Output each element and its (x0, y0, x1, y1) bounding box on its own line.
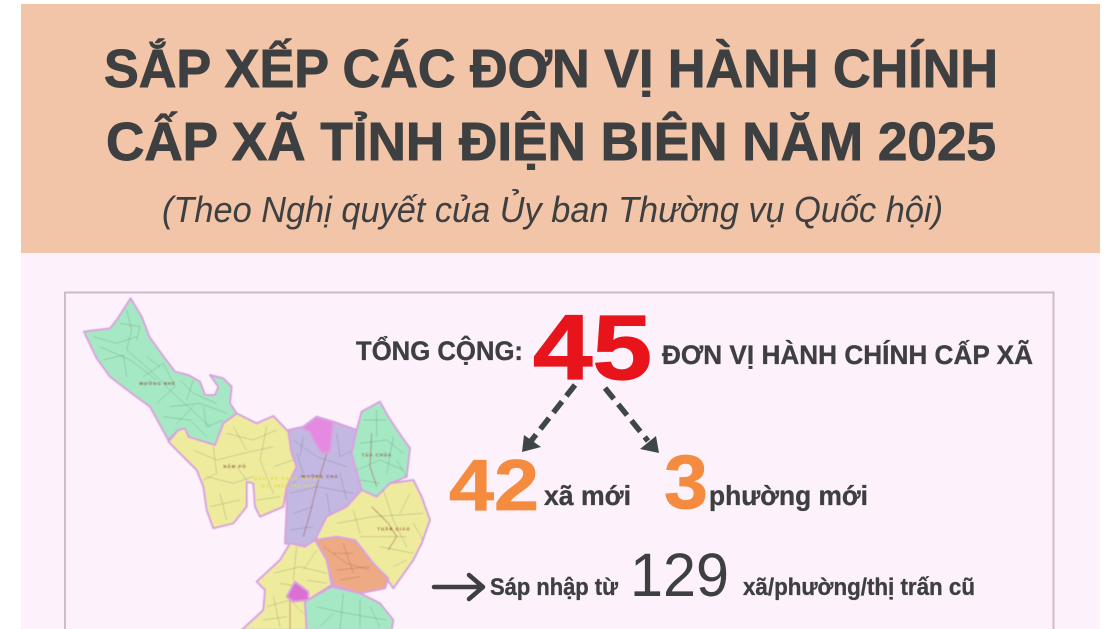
label phuong moi: phường mới (709, 480, 868, 511)
content frame (65, 292, 1054, 629)
region: Muong Nhe: MƯỜNG NHÉ (139, 381, 176, 386)
total label: TỔNG CỘNG: (356, 335, 523, 366)
merged label: Sáp nhập từ (490, 574, 619, 601)
map watermark: ĐT: 0903 654 247 (262, 483, 314, 488)
title line 2: CẤP XÃ TỈNH ĐIỆN BIÊN NĂM 2025 (106, 111, 996, 172)
region: Tuan Giao (315, 480, 430, 588)
stat: 42 communes (449, 446, 631, 526)
region: Muong Nhe (84, 298, 237, 445)
region: Muong Cha: MƯỜNG CHÀ (302, 474, 339, 479)
region: Nam Po: NẬM PỒ (223, 464, 247, 469)
map watermark: Bản đồ hành chính (254, 476, 321, 481)
label xa moi: xã mới (544, 480, 631, 511)
region: Tuan Giao: TUẦN GIÁO (377, 527, 411, 532)
subtitle: (Theo Nghị quyết của Ủy ban Thường vụ Quốc hội) (162, 188, 943, 230)
merged-from row (434, 541, 975, 609)
number 129: 129 (630, 541, 729, 609)
map watermark (254, 476, 321, 488)
region: Dien Bien (242, 540, 332, 629)
header band (21, 4, 1100, 253)
number 3: 3 (664, 440, 708, 525)
map of Dien Bien province (84, 298, 430, 629)
old units label: xã/phường/thị trấn cũ (743, 574, 975, 601)
region: Dien Bien Dong (305, 587, 393, 629)
region: Tua Chua: TỦA CHÙA (362, 453, 392, 458)
region: Nam Po (168, 413, 297, 528)
region: Muong Ang (315, 537, 388, 593)
region: Muong Cha (285, 417, 362, 547)
stat: 3 wards (664, 440, 868, 525)
number 42: 42 (449, 446, 539, 526)
dashed arrow to 42 (522, 385, 575, 452)
icon: right arrow (434, 575, 483, 599)
number 45: 45 (533, 297, 652, 399)
page background panel (21, 253, 1100, 629)
dashed arrow to 3 (605, 388, 659, 453)
region: Muong Lay (302, 417, 333, 453)
total unit: ĐƠN VỊ HÀNH CHÍNH CẤP XÃ (662, 339, 1033, 370)
region: Tua Chua (352, 402, 410, 497)
total row (356, 297, 1033, 399)
region: Dien Bien Phu (287, 582, 308, 602)
title line 1: SẮP XẾP CÁC ĐƠN VỊ HÀNH CHÍNH (104, 38, 998, 99)
